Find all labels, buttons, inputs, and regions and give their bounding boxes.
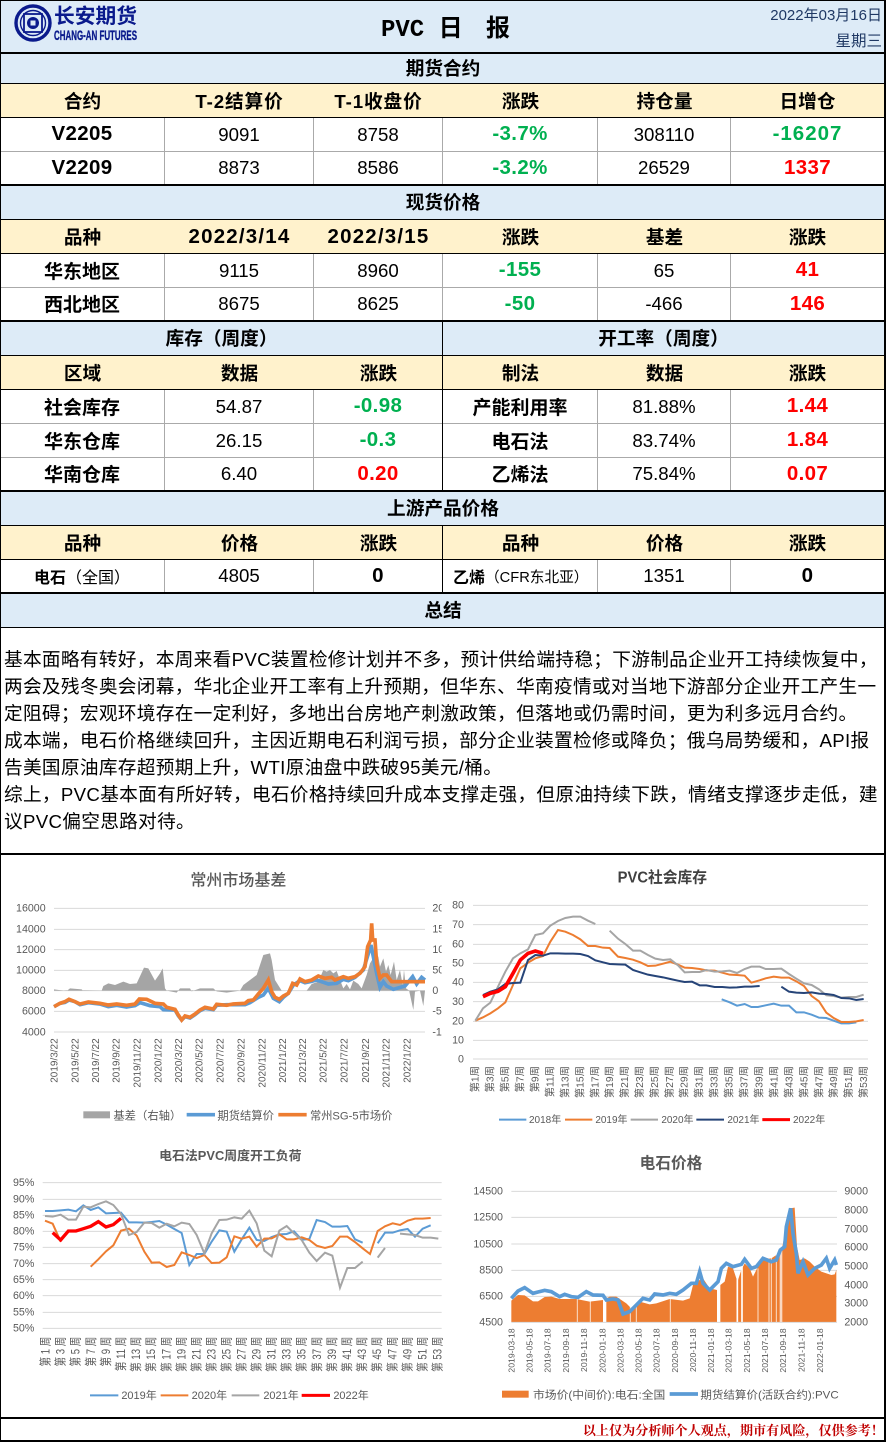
chart: PVC social inventory: 第19周 — [603, 1066, 616, 1098]
legend: 2020年 — [192, 1388, 227, 1402]
chart: carbide-method PVC weekly operating load: 55% — [13, 1307, 35, 1319]
chart: Changzhou market basis: 2021/9/22 — [361, 1038, 372, 1083]
row: social inventory / capacity utilisation: 1.44 — [787, 394, 828, 417]
row: South China warehouse / ethylene method: 乙烯法 — [491, 465, 548, 486]
series: 2022 — [53, 1218, 121, 1240]
chart: Changzhou market basis: 6000 — [22, 1006, 46, 1018]
chart: carbide-method PVC weekly operating load: 第 41 周 — [339, 1337, 354, 1372]
chart: PVC social inventory: 第53周 — [857, 1066, 870, 1098]
chart: Changzhou market basis: 2019/3/22 — [49, 1038, 60, 1083]
chart: Changzhou market basis: 50 — [432, 965, 444, 977]
row: East China warehouse / carbide method: 华东仓库 — [44, 432, 120, 452]
chart: carbide price: 2019-09-18 — [561, 1328, 571, 1373]
legend — [83, 1108, 392, 1122]
chart: PVC social inventory: 0 — [458, 1053, 464, 1065]
chart: carbide price: 2021-01-18 — [706, 1328, 716, 1373]
row: East China warehouse / carbide method: 电石法 — [491, 432, 548, 452]
table header row: 涨跌 — [789, 227, 826, 248]
chart: PVC social inventory — [442, 860, 883, 1140]
chart: PVC social inventory: 第17周 — [588, 1066, 601, 1098]
summary text: 综上，PVC基本面有所好转，电石价格持续回升成本支撑走强，但原油持续下跌，情绪支撑逐步走低，建 — [4, 784, 878, 805]
panel: futures contracts — [1, 54, 884, 186]
summary text: 议PVC偏空思路对待。 — [4, 811, 195, 832]
chart title: PVC社会库存 — [618, 868, 707, 886]
table header row: 日增仓 — [780, 91, 835, 112]
chart: PVC social inventory: 70 — [452, 919, 464, 931]
chart: carbide price: 2021-07-18 — [760, 1328, 770, 1373]
chart title: 电石价格 — [640, 1153, 703, 1172]
table header row: 区域 — [64, 363, 101, 384]
row: V2205 — [0, 118, 886, 152]
chart: PVC social inventory: 第3周 — [484, 1066, 497, 1092]
chart: carbide price: 2019-07-18 — [542, 1328, 552, 1373]
chart: PVC social inventory: 50 — [452, 958, 464, 970]
legend — [90, 1388, 369, 1402]
summary text: 告美国原油库存超预期上升，WTI原油盘中跌破95美元/桶。 — [4, 757, 502, 778]
panel: upstream product prices — [1, 492, 884, 594]
chart: PVC social inventory: 第5周 — [499, 1066, 512, 1092]
row: East China: 8960 — [357, 260, 399, 280]
logo: Chang-An Futures: 长安期货 — [54, 4, 137, 28]
chart: Changzhou market basis: 16000 — [16, 903, 46, 915]
chart: carbide-method PVC weekly operating load: 65% — [13, 1274, 35, 1286]
chart: carbide price: 7000 — [844, 1223, 868, 1235]
chart: carbide price — [473, 1153, 868, 1401]
chart: Changzhou market basis: 2021/7/22 — [340, 1038, 351, 1083]
row: East China warehouse / carbide method — [0, 424, 886, 458]
chart: PVC social inventory: 第1周 — [469, 1066, 482, 1092]
chart: PVC social inventory: 第33周 — [708, 1066, 721, 1098]
legend: 2020年 — [661, 1113, 694, 1126]
chart: Changzhou market basis: 2019/5/22 — [70, 1038, 81, 1083]
chart: PVC social inventory: 第41周 — [767, 1066, 780, 1098]
table header row: 基差 — [646, 227, 683, 248]
chart: Changzhou market basis: 2022/1/22 — [402, 1038, 413, 1083]
table header row: 价格 — [221, 533, 258, 554]
chart: carbide-method PVC weekly operating load: 80% — [13, 1226, 35, 1238]
chart: Changzhou market basis: 2021/3/22 — [298, 1038, 309, 1083]
chart: Changzhou market basis: 2020/9/22 — [237, 1038, 248, 1083]
row: Northwest — [0, 288, 886, 322]
row: East China: 9115 — [219, 260, 259, 280]
chart: PVC social inventory: 第49周 — [827, 1066, 840, 1098]
chart: carbide-method PVC weekly operating load: 第 35 周 — [294, 1337, 309, 1372]
page header — [0, 0, 886, 54]
chart: carbide-method PVC weekly operating load: 50% — [13, 1323, 35, 1335]
heading: upstream product prices: 上游产品价格 — [387, 498, 499, 519]
chart: carbide-method PVC weekly operating load: 第 21 周 — [188, 1337, 204, 1372]
chart: carbide-method PVC weekly operating load: 第 49 周 — [399, 1337, 415, 1372]
chart: carbide-method PVC weekly operating load: 第 13 周 — [128, 1337, 143, 1372]
chart: carbide price: 2020-09-18 — [670, 1328, 680, 1373]
chart: Changzhou market basis — [16, 870, 444, 1122]
panel: inventory and operating rate — [1, 322, 884, 492]
chart: carbide-method PVC weekly operating load: 第 23 周 — [203, 1337, 219, 1372]
footer disclaimer — [0, 1417, 886, 1442]
row: Northwest: -50 — [505, 292, 535, 314]
chart: Changzhou market basis: 15 — [432, 924, 444, 936]
chart: PVC social inventory: 第7周 — [513, 1066, 526, 1092]
table header row — [0, 84, 886, 118]
chart: carbide-method PVC weekly operating load: 第 43 周 — [354, 1337, 369, 1372]
table header row: 涨跌 — [502, 91, 539, 112]
table header row: 涨跌 — [502, 227, 539, 248]
series: 2018 — [722, 999, 856, 1023]
chart: PVC social inventory: 第39周 — [752, 1066, 765, 1098]
chart: PVC social inventory: 60 — [452, 939, 464, 951]
chart: Changzhou market basis: 2020/5/22 — [195, 1038, 206, 1083]
chart: carbide-method PVC weekly operating load: 85% — [13, 1210, 35, 1222]
chart: carbide price: 4500 — [479, 1316, 503, 1328]
row: Northwest: 西北地区 — [44, 295, 120, 316]
row: East China: 华东地区 — [44, 262, 120, 282]
chart: carbide-method PVC weekly operating load: 第 11 周 — [113, 1337, 128, 1371]
heading: summary — [0, 594, 886, 628]
chart: Changzhou market basis: 20 — [432, 903, 444, 915]
chart: carbide-method PVC weekly operating load: 第 7 周 — [83, 1337, 98, 1367]
row: V2205: 9091 — [218, 124, 260, 144]
legend: 2019年 — [121, 1388, 157, 1402]
row: V2209: -3.2% — [492, 156, 548, 178]
row: South China warehouse / ethylene method: 0.20 — [357, 462, 399, 484]
chart: Changzhou market basis: 2020/11/22 — [257, 1038, 268, 1088]
chart: Changzhou market basis: 10 — [432, 944, 444, 956]
chart: carbide-method PVC weekly operating load: 第 25 周 — [218, 1337, 234, 1372]
chart: carbide-method PVC weekly operating load: 第 1 周 — [38, 1337, 53, 1367]
chart: carbide-method PVC weekly operating load: 第 19 周 — [173, 1337, 189, 1372]
panel: spot prices — [1, 186, 884, 322]
chart title: 常州市场基差 — [190, 870, 286, 889]
chart: Changzhou market basis: 2019/9/22 — [112, 1038, 123, 1083]
chart: carbide-method PVC weekly operating load: 75% — [13, 1242, 35, 1254]
heading: inventory and operating rate: 开工率（周度） — [598, 328, 729, 348]
chart: Changzhou market basis: 2020/3/22 — [174, 1038, 185, 1083]
chart: carbide-method PVC weekly operating load: 第 53 周 — [429, 1337, 445, 1372]
table header row: 2022/3/15 — [328, 224, 430, 248]
legend: 2018年 — [529, 1113, 561, 1126]
chart: carbide price: 2020-05-18 — [633, 1328, 643, 1373]
chart: PVC social inventory: 第45周 — [797, 1066, 810, 1098]
chart: PVC social inventory: 第29周 — [678, 1066, 691, 1098]
summary text: 定阻碍；宏观环境存在一定利好，多地出台房地产刺激政策，但落地或仍需时间，更为利多远月合约。 — [4, 703, 857, 724]
chart: Changzhou market basis: 2021/1/22 — [278, 1038, 289, 1083]
chart: Changzhou market basis: 2019/7/22 — [91, 1038, 102, 1083]
chart: carbide price: 2019-11-18 — [579, 1328, 589, 1372]
chart: carbide price: 2020-03-18 — [615, 1328, 625, 1373]
chart: carbide price: 4000 — [844, 1279, 868, 1291]
column divider: upstream section — [442, 526, 443, 593]
date: 2022年03月16日 — [770, 7, 882, 24]
row: Northwest: 146 — [790, 292, 825, 314]
row: South China warehouse / ethylene method: 0.07 — [787, 462, 828, 484]
Changzhou SG-5 line — [54, 923, 425, 1020]
chart: carbide-method PVC weekly operating load: 第 9 周 — [98, 1337, 113, 1367]
row: East China: 41 — [796, 258, 819, 281]
disclaimer text: 以上仅为分析师个人观点，期市有风险，仅供参考！ — [583, 1423, 884, 1438]
chart: carbide-method PVC weekly operating load: 第 39 周 — [324, 1337, 339, 1372]
chart: carbide-method PVC weekly operating load: 第 29 周 — [249, 1337, 264, 1372]
chart: carbide price: 8000 — [844, 1204, 868, 1216]
series: 2019 — [475, 930, 864, 1022]
futures settlement line — [511, 1208, 836, 1314]
chart: Changzhou market basis: -1 — [432, 1026, 442, 1038]
series: 2021 — [45, 1201, 438, 1288]
chart: carbide-method PVC weekly operating load: 60% — [13, 1290, 35, 1302]
chart: carbide price: 2020-07-18 — [651, 1328, 661, 1373]
table header row: 持仓量 — [637, 91, 692, 112]
chart: carbide-method PVC weekly operating load: 70% — [13, 1258, 35, 1270]
chart: Changzhou market basis: 14000 — [16, 924, 46, 936]
row: V2205: 8758 — [357, 124, 399, 144]
row: V2209: V2209 — [51, 156, 113, 178]
table header row — [0, 356, 886, 390]
table header row: 品种 — [64, 533, 101, 554]
chart: carbide price: 2020-01-18 — [597, 1328, 607, 1373]
chart: Changzhou market basis: 2020/1/22 — [153, 1038, 164, 1083]
chart: carbide price: 2021-05-18 — [742, 1328, 752, 1373]
row: carbide / ethylene: 电石 — [34, 570, 66, 587]
row: carbide / ethylene: （CFR东北亚） — [485, 570, 588, 586]
chart: carbide-method PVC weekly operating load: 第 3 周 — [53, 1337, 68, 1367]
chart: Changzhou market basis: 2019/11/22 — [132, 1038, 143, 1088]
row: East China — [0, 254, 886, 288]
chart: Changzhou market basis: 8000 — [22, 985, 46, 997]
chart: Changzhou market basis: 4000 — [22, 1026, 46, 1038]
panel: summary — [1, 594, 884, 855]
row: carbide / ethylene: 0 — [802, 564, 813, 586]
table header row: 品种 — [64, 227, 101, 248]
basis area — [54, 953, 425, 1010]
heading: futures contracts: 期货合约 — [406, 58, 480, 79]
chart: carbide price: 14500 — [473, 1186, 503, 1198]
row: East China warehouse / carbide method: -0.3 — [360, 428, 396, 451]
table header row: 数据 — [221, 363, 258, 384]
row: South China warehouse / ethylene method: 6.40 — [221, 463, 257, 484]
series: 2022 — [483, 951, 543, 997]
row: carbide / ethylene: 0 — [372, 564, 384, 586]
row: East China: -155 — [499, 258, 541, 281]
table header row: 涨跌 — [360, 533, 397, 554]
chart: carbide price: 8500 — [479, 1265, 503, 1277]
table header row: 制法 — [502, 363, 539, 384]
chart: carbide price: 6500 — [479, 1291, 503, 1303]
row: carbide / ethylene — [0, 560, 886, 594]
chart title: 电石法PVC周度开工负荷 — [159, 1148, 302, 1163]
row: Northwest: 8625 — [357, 293, 399, 314]
table header row: 价格 — [646, 533, 683, 554]
chart: carbide-method PVC weekly operating load: 第 27 周 — [234, 1337, 249, 1372]
table header row — [0, 526, 886, 560]
legend: 期货结算价 — [217, 1108, 274, 1122]
legend: 2021年 — [727, 1113, 760, 1126]
row: carbide / ethylene: 乙烯 — [453, 570, 485, 587]
table header row: 涨跌 — [789, 533, 826, 554]
chart: carbide price: 2021-11-18 — [796, 1328, 806, 1372]
table header row: 品种 — [502, 533, 539, 554]
chart: PVC social inventory: 第51周 — [842, 1066, 855, 1098]
legend: 2022年 — [333, 1388, 369, 1402]
chart: carbide price: 9000 — [844, 1186, 868, 1198]
chart: Changzhou market basis: 2020/7/22 — [215, 1038, 226, 1083]
chart: carbide-method PVC weekly operating load — [13, 1148, 445, 1402]
logo: Chang-An Futures — [14, 4, 137, 43]
legend: 2019年 — [595, 1113, 628, 1126]
chart: carbide price: 2020-11-18 — [688, 1328, 698, 1372]
row: social inventory / capacity utilisation: 社会库存 — [44, 398, 120, 418]
chart: carbide-method PVC weekly operating load: 第 51 周 — [414, 1337, 430, 1372]
row: V2205: -16207 — [773, 122, 842, 145]
table header row: 涨跌 — [789, 363, 826, 384]
chart: carbide price: 10500 — [473, 1238, 503, 1250]
heading: futures contracts — [0, 54, 886, 84]
chart: carbide price: 2022-01-18 — [815, 1328, 825, 1373]
series: 2019 — [45, 1205, 431, 1265]
row: V2209: 8873 — [218, 157, 260, 178]
heading: summary: 总结 — [424, 600, 462, 621]
heading: inventory and operating rate — [0, 322, 886, 356]
chart: Changzhou market basis: 2021/11/22 — [382, 1038, 393, 1088]
row: V2205: -3.7% — [492, 122, 548, 145]
row: V2209 — [0, 152, 886, 186]
row: South China warehouse / ethylene method — [0, 458, 886, 492]
summary text: 基本面略有转好，本周来看PVC装置检修计划并不多，预计供给端持稳；下游制品企业开工持续恢复中， — [4, 649, 878, 670]
summary text: 两会及残冬奥会闭幕，华北企业开工率有上升预期，但华东、华南疫情或对当地下游部分企业开工产生一 — [4, 676, 876, 697]
futures settlement line — [54, 945, 425, 1020]
chart: carbide price: 3000 — [844, 1298, 868, 1310]
table header row: 涨跌 — [360, 363, 397, 384]
chart: carbide-method PVC weekly operating load: 95% — [13, 1177, 35, 1189]
chart: PVC social inventory: 30 — [452, 996, 464, 1008]
table header row: T-2结算价 — [195, 91, 284, 112]
chart: carbide price: 5000 — [844, 1260, 868, 1272]
legend: 常州SG-5市场价 — [310, 1108, 392, 1122]
row: V2209: 8586 — [357, 157, 399, 178]
row: East China: 65 — [654, 260, 674, 280]
row: carbide / ethylene: 4805 — [218, 565, 260, 586]
heading: spot prices — [0, 186, 886, 220]
heading: upstream product prices — [0, 492, 886, 526]
row: Northwest: -466 — [645, 293, 683, 314]
chart: carbide-method PVC weekly operating load: 90% — [13, 1194, 35, 1206]
legend: 2022年 — [793, 1113, 825, 1126]
chart: PVC social inventory: 第13周 — [558, 1066, 571, 1098]
row: carbide / ethylene: 1351 — [643, 565, 685, 586]
row: V2205: 308110 — [634, 124, 694, 144]
chart: carbide price: 2000 — [844, 1316, 868, 1328]
chart: carbide-method PVC weekly operating load: 第 17 周 — [158, 1337, 174, 1372]
row: Northwest: 8675 — [218, 293, 260, 314]
chart: carbide price: 12500 — [473, 1212, 503, 1224]
chart: PVC social inventory: 第35周 — [723, 1066, 736, 1098]
row: social inventory / capacity utilisation: 81.88% — [632, 396, 696, 416]
chart: PVC social inventory: 第23周 — [633, 1066, 646, 1098]
legend: 2021年 — [263, 1388, 299, 1402]
row: social inventory / capacity utilisation: 54.87 — [216, 396, 262, 416]
column divider: inventory section — [442, 322, 443, 491]
chart: carbide price: 2021-03-18 — [723, 1328, 733, 1373]
summary text: 成本端，电石价格继续回升，主因近期电石利润亏损，部分企业装置检修或降负；俄乌局势缓和，API报 — [4, 730, 870, 751]
chart: PVC social inventory: 第37周 — [738, 1066, 751, 1098]
row: South China warehouse / ethylene method: 75.84% — [632, 463, 696, 484]
chart: PVC social inventory: 第31周 — [693, 1066, 706, 1098]
weekday: 星期三 — [835, 33, 882, 50]
chart: carbide-method PVC weekly operating load: 第 33 周 — [279, 1337, 294, 1372]
chart: PVC social inventory: 第43周 — [782, 1066, 795, 1098]
legend: 基差（右轴） — [113, 1108, 181, 1122]
series: 2020 — [45, 1218, 431, 1267]
row: East China warehouse / carbide method: 26.15 — [216, 430, 262, 450]
row: social inventory / capacity utilisation — [0, 390, 886, 424]
table header row: 合约 — [64, 91, 101, 112]
chart: carbide-method PVC weekly operating load: 第 37 周 — [309, 1337, 324, 1372]
table header row: T-1收盘价 — [334, 91, 423, 112]
chart: Changzhou market basis: 2021/5/22 — [319, 1038, 330, 1083]
chart: PVC social inventory: 第15周 — [573, 1066, 586, 1098]
row: social inventory / capacity utilisation: 产能利用率 — [472, 398, 568, 418]
table header row — [0, 220, 886, 254]
series: 2020 — [475, 917, 864, 1021]
chart: carbide-method PVC weekly operating load: 第 15 周 — [143, 1337, 158, 1372]
summary text — [0, 628, 886, 855]
chart: Changzhou market basis: 12000 — [16, 944, 46, 956]
chart: PVC social inventory: 第9周 — [528, 1066, 541, 1092]
legend: 市场价(中间价):电石:全国 — [533, 1387, 665, 1401]
row: V2209: 1337 — [784, 156, 831, 178]
chart: carbide price: 2019-05-18 — [524, 1328, 534, 1373]
chart: PVC social inventory: 第47周 — [812, 1066, 825, 1098]
chart: carbide-method PVC weekly operating load: 第 45 周 — [369, 1337, 384, 1372]
chart: PVC social inventory: 第27周 — [663, 1066, 676, 1098]
chart: Changzhou market basis: 0 — [432, 985, 438, 997]
chart: PVC social inventory: 10 — [452, 1035, 464, 1047]
chart: PVC social inventory: 20 — [452, 1016, 464, 1028]
chart: carbide price: 2019-03-18 — [506, 1328, 516, 1373]
chart: carbide-method PVC weekly operating load: 第 5 周 — [68, 1337, 83, 1367]
chart: carbide-method PVC weekly operating load: 第 31 周 — [264, 1337, 279, 1372]
row: South China warehouse / ethylene method: 华南仓库 — [44, 465, 120, 486]
chart: PVC social inventory: 第11周 — [543, 1066, 556, 1097]
table header row: 2022/3/14 — [188, 224, 290, 248]
chart: PVC social inventory: 80 — [452, 900, 464, 912]
legend: 期货结算价(活跃合约):PVC — [700, 1387, 839, 1401]
chart: PVC social inventory: 第21周 — [618, 1066, 631, 1098]
chart: PVC social inventory: 第25周 — [648, 1066, 661, 1098]
heading: spot prices: 现货价格 — [406, 192, 480, 213]
market price area — [511, 1208, 836, 1322]
row: V2209: 26529 — [638, 157, 690, 178]
heading: inventory and operating rate: 库存（周度） — [166, 328, 277, 348]
chart: Changzhou market basis: -5 — [432, 1006, 442, 1018]
row: V2205: V2205 — [51, 122, 113, 145]
legend — [502, 1387, 839, 1401]
row: carbide / ethylene: （全国） — [66, 570, 130, 587]
chart: Changzhou market basis: 10000 — [16, 965, 46, 977]
chart: carbide price: 2021-09-18 — [778, 1328, 788, 1373]
table header row: 数据 — [646, 363, 683, 384]
title: PVC 日 报 — [381, 15, 510, 44]
chart: carbide price: 6000 — [844, 1241, 868, 1253]
row: East China warehouse / carbide method: 83.74% — [632, 430, 696, 450]
legend — [499, 1113, 825, 1126]
chart: carbide-method PVC weekly operating load: 第 47 周 — [384, 1337, 400, 1372]
row: social inventory / capacity utilisation: -0.98 — [354, 394, 402, 417]
row: East China warehouse / carbide method: 1.84 — [787, 428, 828, 451]
chart: PVC social inventory: 40 — [452, 977, 464, 989]
series: 2021 — [483, 953, 864, 1000]
